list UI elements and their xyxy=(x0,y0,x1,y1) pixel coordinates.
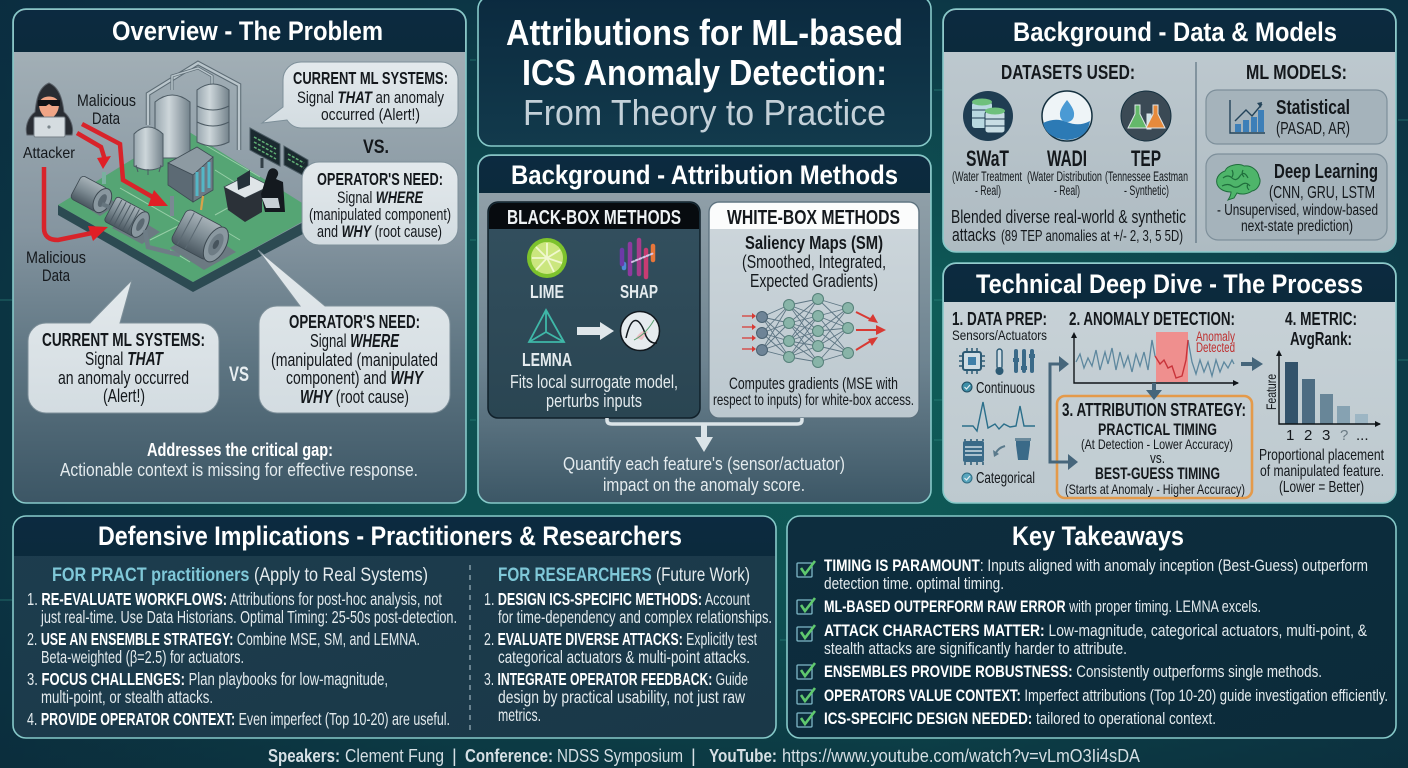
icon: brain xyxy=(1217,165,1260,200)
step 2: anomaly detection chart xyxy=(1069,309,1239,386)
list: practitioners: 2. USE AN ENSEMBLE STRATEGY: Combine MSE, SM, and LEMNA. xyxy=(27,629,420,649)
footer: speakers and links: | xyxy=(691,745,696,766)
callout: current ml systems bottom xyxy=(28,280,219,413)
footer: speakers and links xyxy=(268,745,1141,766)
dataset labels: - Synthetic) xyxy=(1124,183,1169,198)
heading: process: Technical Deep Dive - The Process xyxy=(976,269,1363,299)
step 3: attribution strategy: (Starts at Anomaly - Higher Accuracy) xyxy=(1065,481,1245,497)
vs top: VS. xyxy=(363,137,389,158)
icon: lime xyxy=(527,238,567,278)
callout: current ml systems bottom: an anomaly occurred xyxy=(58,368,189,388)
card: white-box methods xyxy=(709,202,919,418)
title: Attributions for ML-based xyxy=(506,12,903,53)
callout: operator's need bottom: OPERATOR'S NEED: xyxy=(289,312,420,332)
card: statistical xyxy=(1206,90,1387,144)
label: malicious data top: Data xyxy=(92,109,120,128)
dataset labels: TEP xyxy=(1131,146,1161,171)
card: white-box methods: respect to inputs) for white-box access. xyxy=(713,392,914,409)
callout: operator's need bottom: (manipulated (manipulated xyxy=(271,350,438,370)
heading: ml models: ML MODELS: xyxy=(1246,62,1347,84)
footer: speakers and links: Clement Fung xyxy=(345,745,444,766)
list: takeaways: ML-BASED OUTPERFORM RAW ERROR with proper timing. LEMNA excels. xyxy=(824,597,1261,616)
title: From Theory to Practice xyxy=(523,92,886,133)
footer: speakers and links: Conference: xyxy=(465,745,553,766)
callout: current ml systems top: occurred (Alert!) xyxy=(321,105,420,124)
footer: speakers and links: YouTube: xyxy=(709,745,777,766)
dataset labels: (Tennessee Eastman xyxy=(1105,169,1188,184)
footer: speakers and links: | xyxy=(452,745,457,766)
icon: waveform xyxy=(962,402,1035,431)
text: critical gap xyxy=(60,440,418,480)
list: researchers xyxy=(484,589,772,725)
list: takeaways xyxy=(824,556,1388,728)
arrow: lemna to surrogate xyxy=(577,322,614,340)
panel: title xyxy=(478,0,931,146)
bar chart: Feature xyxy=(1263,374,1279,410)
heading: key takeaways: Key Takeaways xyxy=(1012,521,1184,551)
label: lemna: LEMNA xyxy=(522,350,572,370)
text: dataset note: Blended diverse real-world & synthetic xyxy=(951,207,1186,227)
text: conclusion xyxy=(563,453,845,495)
heading: attribution methods: Background - Attribution Methods xyxy=(511,160,898,190)
text: dataset note: (89 TEP anomalies at +/- 2, 3, 5 5D) xyxy=(1001,228,1183,245)
step 3: attribution strategy: 3. ATTRIBUTION STRATEGY: xyxy=(1062,400,1246,420)
text: dataset note: attacks xyxy=(952,225,996,245)
text: critical gap: Addresses the critical gap: xyxy=(147,440,333,460)
step 1: data prep: Sensors/Actuators xyxy=(952,327,1047,343)
icon: lemna xyxy=(529,310,564,342)
step 1: data prep: 1. DATA PREP: xyxy=(952,309,1047,329)
callout: current ml systems top: Signal THAT an anomaly xyxy=(297,88,444,107)
dataset labels xyxy=(952,146,1188,198)
callout: current ml systems bottom: CURRENT ML SYSTEMS: xyxy=(42,330,205,350)
step 3: attribution strategy: BEST-GUESS TIMING xyxy=(1095,464,1220,483)
label: malicious data bottom xyxy=(26,248,86,285)
arrow: detection to metric xyxy=(1241,357,1263,371)
pipes xyxy=(148,63,239,150)
label: shap: SHAP xyxy=(620,282,658,302)
dataset labels: - Real) xyxy=(1054,183,1080,198)
control cabinet xyxy=(168,147,213,175)
subheading: researchers: FOR RESEARCHERS (Future Work) xyxy=(498,564,750,586)
card: black-box methods: BLACK-BOX METHODS xyxy=(507,207,681,229)
step 2: anomaly detection chart: Detected xyxy=(1196,340,1235,355)
list: practitioners: 4. PROVIDE OPERATOR CONTEXT: Even imperfect (Top 10-20) are useful. xyxy=(27,709,450,729)
icon: categorical components xyxy=(963,438,1031,465)
icon: surrogate model xyxy=(620,312,660,350)
heading: datasets used: DATASETS USED: xyxy=(1001,62,1135,84)
card: deep learning xyxy=(1206,154,1387,240)
check: continuous xyxy=(962,382,972,392)
card: white-box methods: (Smoothed, Integrated, xyxy=(742,252,886,272)
text: black-box description: perturbs inputs xyxy=(546,391,642,411)
text: critical gap: Actionable context is missing for effective response. xyxy=(60,459,418,480)
arrow: data prep to detection and strategy xyxy=(1050,356,1078,470)
card: white-box methods: WHITE-BOX METHODS xyxy=(727,207,900,229)
panel: technical deep dive xyxy=(943,263,1396,503)
step 1: data prep xyxy=(952,309,1047,487)
list: researchers: metrics. xyxy=(498,705,541,725)
list: practitioners: 3. FOCUS CHALLENGES: Plan playbooks for low-magnitude, xyxy=(27,669,388,689)
bar chart: 2 xyxy=(1304,427,1312,444)
list: takeaways: ENSEMBLES PROVIDE ROBUSTNESS: Consistently outperforms single methods. xyxy=(824,662,1322,681)
label: attacker: Attacker xyxy=(23,145,76,162)
label: malicious data top xyxy=(77,91,136,128)
illustration: isometric industrial plant xyxy=(58,63,320,292)
step 3: attribution strategy: (At Detection - Lower Accuracy) xyxy=(1081,436,1233,452)
operator xyxy=(261,168,285,212)
list: takeaways: stealth attacks are significantly harder to attribute. xyxy=(824,639,1127,658)
card: white-box methods: Saliency Maps (SM) xyxy=(745,233,883,253)
dataset labels: WADI xyxy=(1047,146,1087,171)
wall monitors xyxy=(250,128,280,166)
list: researchers: 1. DESIGN ICS-SPECIFIC METHODS: Account xyxy=(484,589,750,609)
subheading: practitioners: FOR PRACT practitioners (Apply to Real Systems) xyxy=(52,564,428,586)
dataset labels: - Real) xyxy=(975,183,1001,198)
neural network diagram xyxy=(742,294,886,368)
step 4: metric avgrank: AvgRank: xyxy=(1290,329,1352,349)
label: continuous: Continuous xyxy=(976,380,1035,397)
list: researchers: 2. EVALUATE DIVERSE ATTACKS: Explicitly test xyxy=(484,629,757,649)
step 4: metric avgrank: 4. METRIC: xyxy=(1285,309,1357,329)
list: researchers: for time-dependency and complex relationships. xyxy=(498,607,772,627)
dataset labels: (Water Treatment xyxy=(952,169,1022,184)
arrows: malicious data xyxy=(44,124,168,241)
divider xyxy=(1195,62,1197,243)
step 2: anomaly detection chart: Anomaly xyxy=(1196,329,1235,344)
callout: current ml systems top xyxy=(262,62,458,128)
step 3: attribution strategy xyxy=(1057,396,1252,498)
label: malicious data top: Malicious xyxy=(77,91,136,110)
check icons xyxy=(797,561,815,727)
callout: operator's need bottom: component) and WHY xyxy=(286,368,425,388)
card: black-box methods xyxy=(488,202,700,418)
card: statistical: Statistical xyxy=(1276,97,1350,119)
list: researchers: design by practical usability, not just raw xyxy=(498,687,745,707)
text: conclusion: impact on the anomaly score. xyxy=(603,474,805,495)
callout: current ml systems top: CURRENT ML SYSTEMS: xyxy=(293,68,448,88)
callout: operator's need bottom xyxy=(258,250,450,413)
heading: defensive implications: Defensive Implications - Practitioners & Researchers xyxy=(98,521,682,551)
list: practitioners: 1. RE-EVALUATE WORKFLOWS: Attributions for post-hoc analysis, not xyxy=(27,589,442,609)
heading: data and models: Background - Data & Models xyxy=(1013,17,1337,47)
icon: attacker xyxy=(26,83,73,137)
bar chart: 1 xyxy=(1286,427,1294,444)
text: black-box description xyxy=(510,372,678,411)
panel: key takeaways xyxy=(787,516,1396,738)
icon: chip xyxy=(959,348,985,374)
callout: operator's need top: (manipulated component) xyxy=(309,205,451,224)
step 4: metric avgrank xyxy=(1259,309,1384,496)
text: metric description: (Lower = Better) xyxy=(1279,479,1364,496)
list: practitioners: Beta-weighted (β=2.5) for actuators. xyxy=(41,647,244,667)
icon: shap xyxy=(622,240,654,277)
arrow: bracket to conclusion xyxy=(607,418,802,452)
operator desk xyxy=(224,175,270,198)
text: black-box description: Fits local surrogate model, xyxy=(510,372,678,392)
icon: thermometer xyxy=(996,349,1004,375)
callout: operator's need top: OPERATOR'S NEED: xyxy=(317,169,443,189)
icon: swat database xyxy=(963,91,1013,141)
check: categorical xyxy=(962,473,972,483)
step 3: attribution strategy: vs. xyxy=(1150,450,1165,467)
label: lime: LIME xyxy=(530,282,564,302)
bar chart: 3 xyxy=(1322,427,1330,444)
text: dataset note xyxy=(951,207,1186,245)
callout: operator's need bottom: WHY (root cause) xyxy=(300,387,409,407)
callout: operator's need top: Signal WHERE xyxy=(337,188,423,207)
card: white-box methods: Expected Gradients) xyxy=(750,271,878,291)
dataset labels: SWaT xyxy=(966,146,1009,171)
step 3: attribution strategy: PRACTICAL TIMING xyxy=(1098,420,1217,439)
label: malicious data bottom: Data xyxy=(42,266,70,285)
label: categorical: Categorical xyxy=(976,470,1035,487)
list: researchers: 3. INTEGRATE OPERATOR FEEDBACK: Guide xyxy=(484,669,748,689)
list: practitioners: just real-time. Use Data Historians. Optimal Timing: 25-50s post-detection. xyxy=(40,607,457,627)
callout: operator's need top: and WHY (root cause) xyxy=(317,222,442,241)
list: practitioners: multi-point, or stealth attacks. xyxy=(41,687,213,707)
text: metric description xyxy=(1259,447,1384,496)
step 2: anomaly detection chart: 2. ANOMALY DETECTION: xyxy=(1069,309,1235,329)
dataset labels: (Water Distribution xyxy=(1027,169,1102,184)
motors xyxy=(74,188,118,216)
icon: tep flasks xyxy=(1121,91,1171,141)
divider dashed xyxy=(469,565,471,732)
list: practitioners xyxy=(27,589,457,729)
card: white-box methods: Computes gradients (MSE with xyxy=(729,375,898,393)
panel: background - attribution methods xyxy=(478,155,931,503)
card: statistical: (PASAD, AR) xyxy=(1276,118,1350,138)
heading: overview: Overview - The Problem xyxy=(112,16,383,46)
callout: operator's need top xyxy=(302,162,458,245)
footer: speakers and links: Speakers: xyxy=(268,745,340,766)
callout: current ml systems bottom: (Alert!) xyxy=(103,386,145,406)
label: malicious data bottom: Malicious xyxy=(26,248,86,267)
icon: sliders xyxy=(1013,349,1035,373)
list: takeaways: detection time. optimal timing. xyxy=(824,574,1004,593)
callout: operator's need bottom: Signal WHERE xyxy=(310,331,400,351)
footer: speakers and links: NDSS Symposium xyxy=(557,745,683,766)
title xyxy=(506,12,903,133)
panel: background - data and models xyxy=(943,9,1396,252)
panel: overview - the problem xyxy=(13,9,466,503)
callout: current ml systems bottom: Signal THAT xyxy=(85,349,165,369)
text: conclusion: Quantify each feature's (sensor/actuator) xyxy=(563,453,845,474)
title: ICS Anomaly Detection: xyxy=(522,52,887,93)
panel: defensive implications xyxy=(13,516,776,738)
list: takeaways: ICS-SPECIFIC DESIGN NEEDED: tailored to operational context. xyxy=(824,709,1216,728)
bar chart: ... xyxy=(1356,427,1369,444)
bar chart: ? xyxy=(1340,427,1348,444)
list: researchers: categorical actuators & multi-point attacks. xyxy=(498,647,750,667)
icon: wadi water xyxy=(1042,91,1092,141)
arrow: detection to strategy xyxy=(1146,383,1162,400)
vs bottom: VS xyxy=(229,363,249,386)
card: deep learning: next-state prediction) xyxy=(1241,218,1353,235)
footer: speakers and links: https://www.youtube.com/watch?v=vLmO3Ii4sDA xyxy=(782,745,1141,766)
bar chart xyxy=(1263,350,1381,444)
tanks xyxy=(134,84,229,175)
